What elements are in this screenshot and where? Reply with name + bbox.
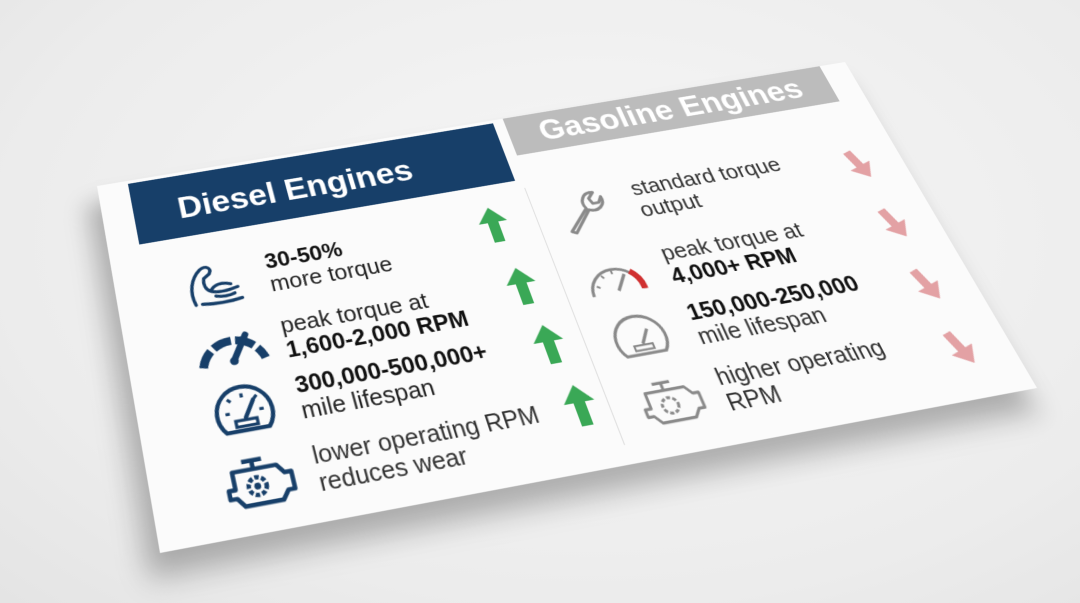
arrow: up green 2: [506, 268, 536, 306]
icon: speedometer: [214, 384, 276, 436]
text: peak torque diesel: peak torque at: [278, 289, 431, 339]
text: peak torque gas: peak torque at: [657, 219, 807, 266]
text: standard torque: [627, 154, 785, 222]
gasoline column: [570, 150, 976, 426]
text: peak torque diesel: 1,600-2,000 RPM: [284, 307, 472, 363]
text: lower RPM: lower operating RPM: [310, 402, 543, 470]
header: diesel engines: [128, 123, 515, 245]
text: lifespan diesel: mile lifespan: [299, 375, 438, 424]
icon: wrench: [570, 190, 605, 235]
icon: tachometer: [198, 330, 270, 370]
text: lifespan gas: mile lifespan: [693, 303, 831, 350]
arrow: down red 3: [910, 268, 941, 299]
text: lifespan diesel: 300,000-500,000+: [292, 339, 491, 399]
diesel column: [189, 208, 594, 510]
text: more torque: more torque: [268, 253, 395, 296]
text: lifespan diesel: [292, 339, 491, 424]
text: lifespan gas: 150,000-250,000: [683, 272, 864, 325]
card: [97, 62, 1037, 553]
text: higher RPM: higher operating: [711, 335, 890, 391]
arrow: up green 3: [533, 324, 564, 364]
text: peak torque gas: 4,000+ RPM: [667, 244, 801, 288]
icon: engine gas: [643, 379, 708, 426]
text: more torque: 30-50%: [262, 238, 345, 274]
text: higher RPM: [711, 335, 890, 416]
text: standard torque: standard torque: [627, 154, 785, 200]
header: gasoline engines: Gasoline Engines: [534, 74, 809, 147]
column divider: [524, 188, 625, 445]
header: gasoline engines: [503, 66, 840, 156]
text: higher RPM: RPM: [722, 381, 786, 416]
icon: speedometer gas: [612, 314, 670, 359]
icon: engine: [226, 456, 298, 510]
icon: tachometer red zone: [590, 267, 649, 298]
text: peak torque gas: [657, 219, 807, 288]
text: lower RPM: reduces wear: [316, 443, 471, 497]
arrow: up green 4: [564, 384, 594, 427]
arrow: down red 1: [843, 150, 872, 177]
arrow: down red 2: [878, 208, 908, 236]
text: standard torque: output: [636, 190, 706, 222]
header: diesel engines: Diesel Engines: [175, 155, 417, 225]
text: lifespan gas: [683, 272, 864, 350]
arrow: up green 1: [478, 208, 508, 243]
arrow: down red 4: [942, 331, 976, 363]
icon: muscle arm: [189, 265, 245, 308]
